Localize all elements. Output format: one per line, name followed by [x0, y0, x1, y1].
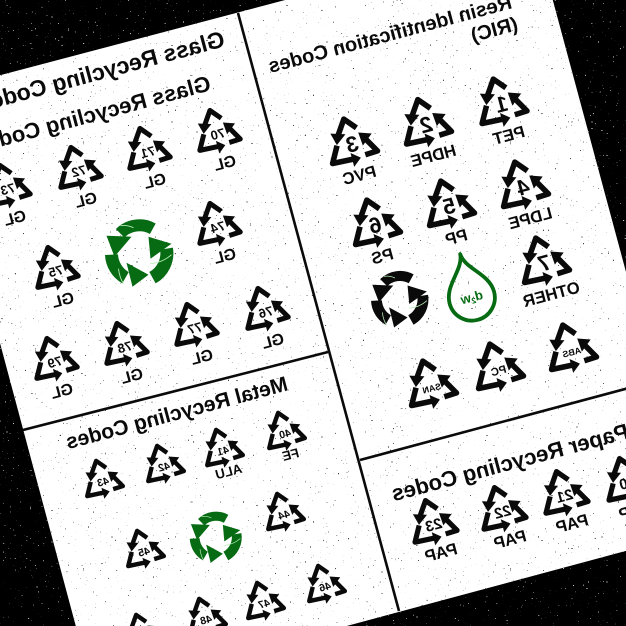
symbol GL 79: 79 [46, 353, 64, 371]
symbol ALU 41: ALU [214, 461, 244, 482]
symbol FE 40: 40 [278, 427, 292, 442]
icon: green recycling arrows metal [191, 516, 240, 563]
symbol 42: 42 [157, 460, 171, 475]
panel: resin identification codes [266, 0, 599, 414]
panel: glass recycling codes [0, 26, 296, 405]
icon: green d2w drop: 2 [470, 296, 477, 306]
symbol GL 76: 76 [257, 303, 275, 321]
symbol PAP 22: 22 [492, 502, 513, 523]
symbol PC [468, 338, 526, 397]
symbol PAP 20 [599, 453, 626, 526]
symbol GL 72: GL [73, 190, 99, 212]
symbol GL 76: GL [260, 331, 286, 353]
symbol PAP 23: PAP [423, 539, 459, 566]
symbol 2 HDPE: HDPE [409, 141, 458, 171]
symbol GL 74: GL [212, 246, 238, 268]
symbol 6 PS [345, 194, 408, 271]
symbol GL 74: 74 [208, 218, 227, 237]
symbol GL 78: GL [119, 366, 145, 388]
symbol 46: 46 [318, 580, 332, 595]
panel: metal recycling codes [63, 373, 347, 626]
symbol 1 PET: PET [491, 122, 527, 149]
symbol 4 LDPE: 4 [513, 174, 532, 201]
symbol 4 LDPE [493, 156, 556, 233]
symbol PAP 21: PAP [554, 510, 590, 537]
symbol PAP 22: PAP [492, 526, 528, 553]
symbol GL 75: 75 [47, 262, 65, 280]
symbol GL 77: 77 [186, 319, 204, 337]
symbol GL 72 [52, 142, 109, 214]
symbol 48 [182, 594, 228, 626]
symbol GL 78: 78 [116, 338, 134, 356]
heading: RIC: (RIC) [469, 13, 520, 47]
heading: paper: Paper Recycling Codes [389, 419, 626, 506]
symbol GL 75: GL [50, 290, 76, 312]
symbol 6 PS: 6 [366, 212, 384, 239]
symbol PAP 23 [405, 495, 464, 568]
symbol 47: 47 [257, 597, 271, 612]
symbol PAP 22 [474, 482, 533, 555]
symbol GL 71: GL [142, 171, 168, 193]
symbol GL 78 [98, 318, 155, 390]
symbol 45: 45 [137, 545, 151, 560]
icon: green d2w drop [438, 248, 500, 326]
icon: green d2w drop: d [473, 287, 485, 304]
symbol 44 [260, 489, 306, 536]
symbol FE 40: FE [280, 445, 301, 464]
symbol 7 OTHER: 7 [535, 250, 553, 277]
symbol GL 70: GL [212, 153, 238, 175]
symbol GL 77: GL [189, 347, 215, 369]
symbol 47 [240, 578, 286, 625]
symbol PAP 21 [536, 466, 595, 539]
symbol GL 71: 71 [139, 143, 157, 161]
symbol 6 PS: PS [369, 244, 396, 268]
symbol 2 HDPE: 2 [417, 111, 435, 138]
symbol PC: PC [490, 364, 508, 379]
heading: metal: Metal Recycling Codes [63, 373, 290, 454]
symbol 43 [79, 456, 125, 503]
symbol SAN [401, 355, 459, 414]
symbol GL 76 [239, 283, 296, 355]
symbol FE 40 [261, 408, 310, 467]
icon: green d2w drop: w [458, 290, 474, 308]
symbol GL 73: GL [2, 208, 28, 230]
symbol 7 OTHER [508, 230, 582, 311]
symbol PAP 21: 21 [554, 486, 575, 507]
icon: black recycling arrows [372, 276, 427, 328]
symbol 45 [120, 526, 166, 573]
symbol 1 PET: 1 [492, 91, 511, 118]
symbol 3 PVC [322, 113, 385, 190]
symbol GL 70: 70 [209, 125, 227, 143]
symbol GL 70 [191, 105, 248, 177]
symbol 4 LDPE: LDPE [506, 203, 554, 233]
symbol PAP 23: 23 [423, 515, 444, 536]
symbol 42 [140, 441, 186, 488]
symbol 5 PP: 5 [440, 193, 458, 220]
symbol 44: 44 [277, 508, 291, 523]
symbol ALU 41 [199, 425, 248, 484]
symbol GL 79 [28, 333, 85, 405]
symbol 3 PVC: PVC [340, 162, 378, 189]
symbol 7 OTHER: OTHER [521, 278, 582, 311]
symbol SAN: SAN [421, 381, 442, 396]
symbol 46 [301, 561, 347, 608]
icon: green recycling arrows glass [106, 225, 172, 287]
symbol GL 79: GL [49, 381, 75, 403]
symbol 49 [119, 610, 165, 626]
symbol 43: 43 [96, 475, 110, 490]
symbol 3 PVC: 3 [343, 131, 361, 158]
symbol GL 72: 72 [70, 162, 88, 180]
symbol GL 73 [0, 160, 38, 232]
symbol ALU 41: 41 [216, 444, 230, 459]
symbol 5 PP [419, 175, 482, 252]
symbol ABS [541, 319, 599, 378]
symbol ABS: ABS [561, 345, 582, 360]
symbol GL 77 [168, 299, 225, 371]
symbol 5 PP: PP [443, 225, 470, 249]
panel: paper recycling codes [389, 419, 626, 568]
symbol 2 HDPE [396, 93, 459, 171]
symbol 1 PET [472, 73, 534, 150]
symbol GL 74 [191, 198, 248, 270]
symbol GL 71 [121, 123, 178, 195]
symbol GL 75 [29, 242, 86, 314]
